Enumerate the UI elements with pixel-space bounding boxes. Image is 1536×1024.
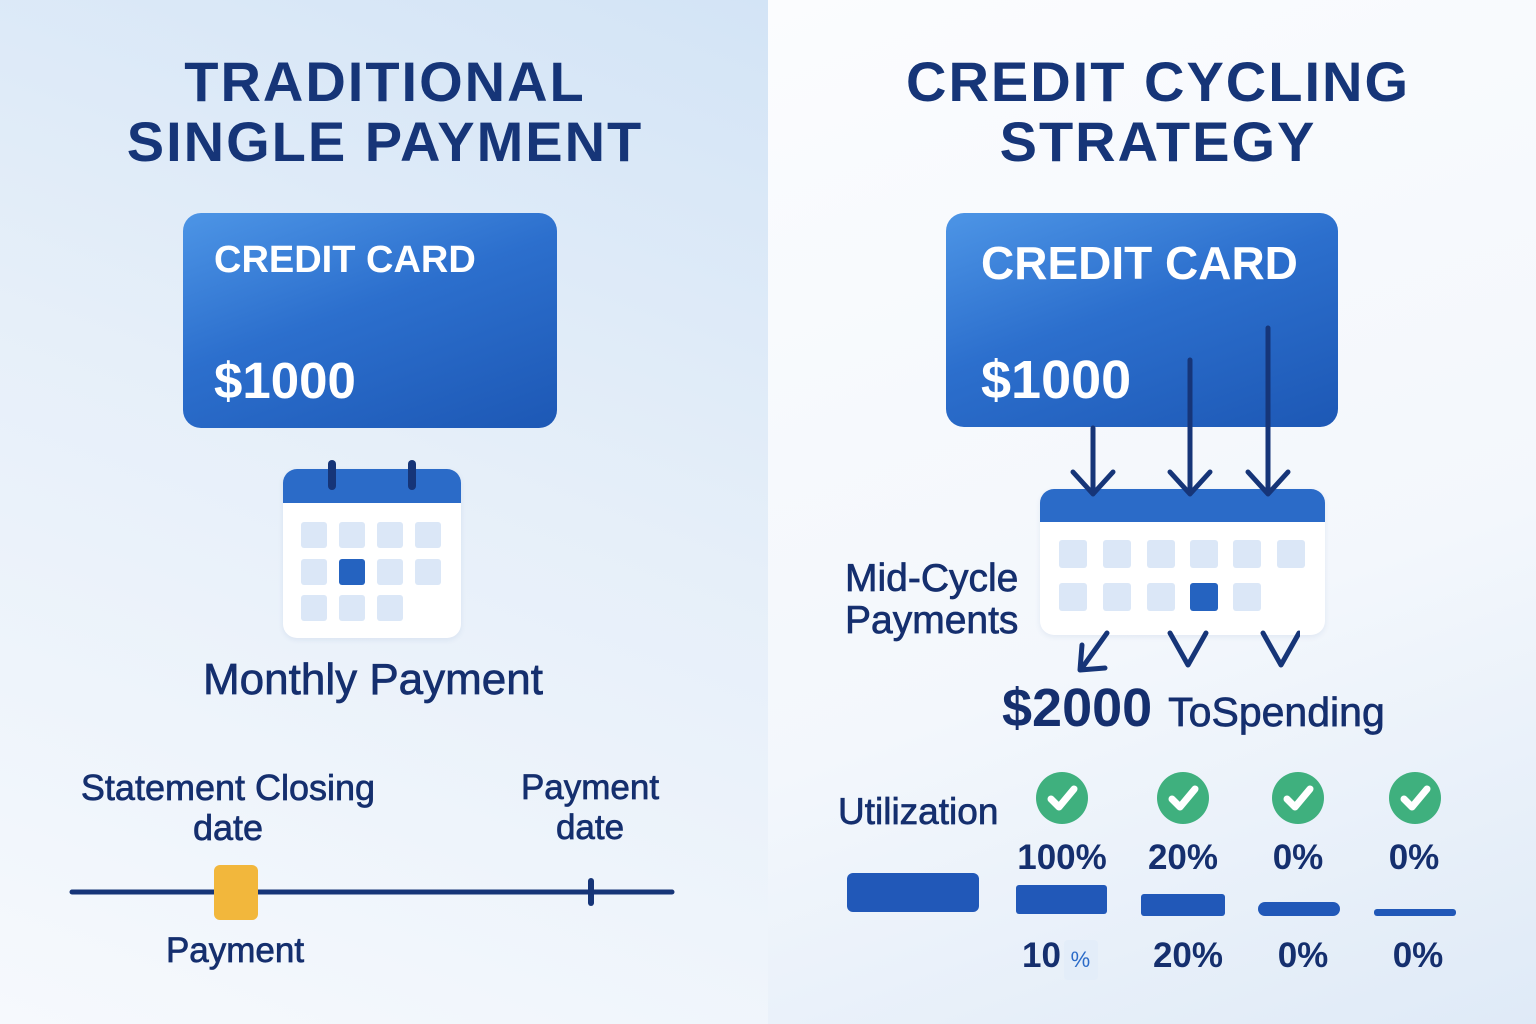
utilization top labels — [1017, 838, 1439, 877]
utilization bottom labels — [1022, 936, 1443, 975]
card: left: $1000 — [214, 352, 356, 409]
background right — [768, 0, 1536, 1024]
label: statement closing date: Statement Closing — [81, 767, 375, 808]
background left — [0, 0, 768, 1024]
label: utilization: Utilization — [838, 791, 998, 832]
label: mid-cycle payments — [845, 557, 1018, 642]
arrows: payments into calendar — [1070, 326, 1300, 672]
bar chart: utilization bars — [847, 873, 1456, 916]
utilization bottom labels: 0% — [1393, 936, 1443, 975]
label: payment date: Payment — [521, 768, 659, 807]
timeline — [70, 865, 674, 920]
label: payment date: date — [556, 808, 624, 847]
title: traditional: TRADITIONAL — [184, 50, 586, 113]
label: statement closing date — [81, 767, 375, 848]
label: payment: Payment — [166, 931, 304, 970]
utilization top labels: 0% — [1273, 838, 1323, 877]
label: $2000 to spending: $2000 ToSpending — [1002, 678, 1385, 738]
title: credit cycling: CREDIT CYCLING — [906, 50, 1410, 113]
title: credit cycling: STRATEGY — [1000, 110, 1316, 173]
card: right — [946, 213, 1338, 427]
title: traditional — [127, 50, 643, 173]
label: monthly payment: Monthly Payment — [203, 655, 543, 704]
icons: check marks — [1036, 772, 1441, 824]
title: credit cycling — [906, 50, 1410, 173]
card: right: CREDIT CARD — [981, 237, 1298, 289]
icon: calendar left — [282, 460, 462, 640]
utilization bottom labels: 10 % — [1022, 936, 1090, 975]
card: right: $1000 — [981, 350, 1131, 410]
card: left — [183, 213, 557, 428]
label: payment date — [521, 768, 660, 847]
label: mid-cycle payments: Payments — [845, 599, 1018, 642]
utilization bottom labels: 0% — [1278, 936, 1328, 975]
card: left: CREDIT CARD — [214, 239, 476, 281]
label: mid-cycle payments: Mid-Cycle — [845, 557, 1018, 600]
title: traditional: SINGLE PAYMENT — [127, 110, 643, 173]
utilization bottom labels: 20% — [1153, 936, 1223, 975]
icon: calendar right — [1040, 489, 1326, 638]
label: statement closing date: date — [193, 807, 263, 848]
utilization top labels: 20% — [1148, 838, 1218, 877]
utilization top labels: 0% — [1389, 838, 1439, 877]
utilization top labels: 100% — [1017, 838, 1107, 877]
